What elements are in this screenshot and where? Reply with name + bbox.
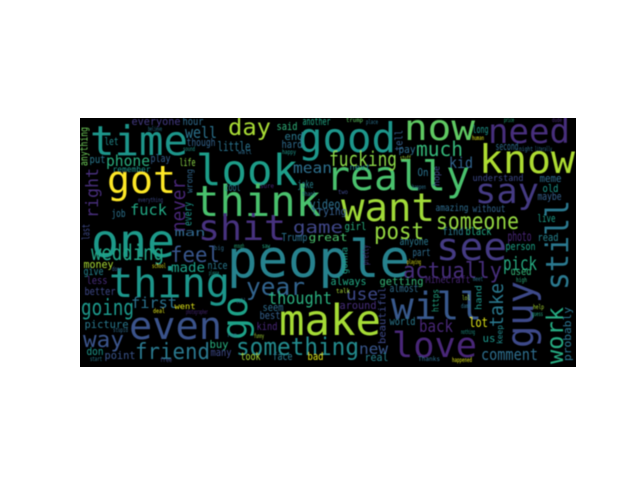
small words: wrong	[186, 169, 196, 193]
small words: everyone	[132, 116, 180, 128]
medium words: probably	[561, 307, 574, 361]
medium words: day	[228, 115, 271, 141]
small words: keep	[496, 325, 504, 344]
tiny faint words: call	[236, 298, 246, 305]
small words: hand	[474, 285, 484, 310]
largest words: say	[475, 172, 539, 212]
largest words: go	[216, 296, 256, 340]
largest words: really	[326, 152, 470, 200]
medium words: someone	[436, 209, 519, 235]
medium words: actually	[403, 259, 502, 284]
tiny faint words: talk	[336, 288, 350, 295]
small words: gonna	[340, 247, 350, 274]
tiny faint words: playing	[407, 259, 421, 266]
small words: read	[538, 232, 558, 244]
tiny faint words: stupid	[113, 327, 128, 334]
small words: used	[510, 266, 532, 278]
tiny faint words: damn	[461, 303, 471, 310]
small words: man	[174, 227, 206, 239]
largest words: think	[194, 177, 321, 227]
tiny faint words: everything	[138, 197, 163, 204]
small words: bad	[308, 351, 324, 363]
tiny faint words: wall	[238, 149, 252, 156]
tiny faint words: dude	[552, 117, 562, 124]
largest words: still	[540, 200, 576, 290]
small words: took	[240, 351, 261, 363]
largest words: need	[488, 112, 570, 152]
small words: many	[210, 347, 232, 359]
medium words: mean	[293, 159, 332, 177]
small words: don	[86, 346, 104, 358]
medium words: lot	[469, 316, 488, 331]
largest words: even	[129, 304, 222, 348]
small words: Minecraft	[426, 275, 470, 286]
small words: remember	[112, 165, 151, 174]
small words: went	[174, 302, 196, 311]
medium words: made	[171, 261, 205, 276]
small words: photo	[508, 230, 532, 245]
small words: almost	[390, 283, 418, 295]
small words: give	[84, 266, 104, 278]
medium words: first	[131, 294, 177, 312]
small words: person	[506, 241, 536, 253]
tiny faint words: saw	[262, 243, 270, 250]
medium words: right	[83, 168, 103, 218]
tiny faint words: guess	[532, 311, 543, 318]
medium words: use	[346, 285, 378, 305]
medium words: fucking	[329, 147, 397, 171]
largest words: shit	[198, 208, 286, 249]
medium words: well	[185, 123, 217, 142]
medium words: way	[83, 328, 124, 353]
small words: pretty	[362, 245, 372, 265]
tiny faint words: human	[472, 135, 484, 142]
medium words: something	[236, 333, 359, 361]
largest words: good	[298, 114, 396, 162]
small words: nice	[208, 260, 228, 272]
tiny faint words: Thanks	[418, 356, 440, 363]
small words: part	[412, 247, 430, 259]
largest words: time	[90, 117, 188, 165]
small words: best	[260, 310, 280, 322]
largest words: make	[279, 296, 381, 346]
tiny faint words: high	[516, 277, 527, 284]
small words: next	[350, 163, 371, 172]
medium words: game	[293, 218, 343, 238]
tiny faint words: happened	[452, 357, 472, 364]
small words: pay	[398, 144, 416, 156]
medium words: kid	[449, 154, 473, 172]
largest words: people	[227, 230, 410, 290]
small words: long	[472, 124, 488, 136]
largest words: want	[341, 186, 435, 231]
medium words: new	[359, 340, 389, 358]
tiny faint words: deal	[153, 308, 165, 315]
medium words: post	[374, 219, 424, 245]
small words: play	[150, 153, 170, 165]
medium words: feel	[170, 243, 220, 267]
small words: face	[272, 351, 292, 363]
largest words: will	[391, 285, 482, 328]
small words: anything	[78, 127, 90, 166]
small words: job	[112, 208, 126, 220]
tiny faint words: funny	[254, 333, 264, 340]
small words: better	[84, 286, 116, 298]
largest words: know	[479, 138, 576, 183]
small words: said	[276, 121, 298, 133]
small words: great	[308, 232, 348, 244]
small words: end	[284, 131, 304, 143]
tiny faint words: meet	[473, 276, 483, 283]
tiny faint words: help	[533, 304, 544, 311]
small words: real	[364, 352, 388, 364]
tiny faint words	[90, 117, 562, 364]
small words: hour	[182, 116, 204, 128]
tiny faint words: please	[209, 270, 219, 277]
largest words: look	[196, 146, 298, 196]
tiny faint words: happy	[282, 149, 296, 156]
tiny faint words: trump	[346, 117, 363, 124]
medium words: back	[419, 317, 453, 337]
small words: second	[496, 141, 518, 153]
small words: On	[418, 167, 428, 179]
small words: beautiful	[378, 287, 388, 344]
small words: understand	[472, 174, 524, 184]
medium words: work	[543, 307, 569, 364]
largest words: thing	[109, 259, 230, 307]
tiny faint words: start	[90, 356, 102, 363]
small words: every	[182, 202, 194, 226]
tiny faint words: night	[519, 146, 533, 153]
tiny faint words: nothing	[461, 329, 475, 336]
small words: maybe	[538, 191, 562, 203]
medium words: year	[246, 273, 305, 301]
small words	[78, 116, 562, 364]
small words: girl	[344, 221, 366, 233]
small words: last	[80, 224, 92, 240]
tiny faint words: enough	[234, 243, 244, 250]
tiny faint words: happen	[412, 184, 426, 191]
medium words: phone	[106, 152, 150, 170]
largest words: got	[107, 158, 176, 202]
medium words: wedding	[91, 241, 164, 265]
tiny faint words: two	[338, 189, 348, 196]
tiny faint words: school	[152, 263, 166, 270]
tiny faint words: lol	[462, 295, 470, 302]
small words: old	[542, 183, 558, 195]
small words: little	[218, 140, 251, 155]
medium words: pick	[503, 253, 537, 275]
tiny faint words: sound	[183, 146, 195, 153]
tiny faint words: literally	[535, 146, 552, 153]
largest words: love	[392, 326, 477, 366]
small words: though	[186, 137, 216, 149]
tiny faint words: stuff	[400, 155, 411, 162]
largest words: now	[404, 108, 475, 149]
small words: find	[442, 226, 464, 238]
small words: point	[104, 350, 136, 362]
small words: meme	[540, 173, 562, 185]
medium words: never	[168, 179, 190, 232]
medium words: thought	[268, 289, 332, 309]
tiny faint words: big	[214, 245, 224, 252]
tiny faint words: price	[504, 117, 514, 124]
small words: https	[432, 289, 442, 312]
medium words: going	[81, 296, 134, 321]
small words: put	[90, 154, 106, 166]
tiny faint words: thank	[302, 191, 316, 198]
small words: Trump	[282, 232, 308, 244]
small words: cool	[224, 182, 240, 194]
tiny faint words: sure	[260, 183, 274, 190]
small words: hope	[432, 166, 442, 186]
medium words: fuck	[130, 201, 167, 219]
small words: anyone	[400, 236, 428, 248]
medium words	[81, 115, 574, 365]
small words: getting	[380, 276, 424, 288]
largest words	[90, 108, 576, 366]
small words: amazing	[436, 203, 468, 214]
largest words: see	[436, 225, 507, 269]
small words: trying	[312, 206, 346, 218]
largest words: guy	[499, 281, 542, 348]
tiny faint words: done	[112, 266, 122, 273]
tiny faint words: photographer	[186, 309, 208, 316]
word cloud panel background	[80, 118, 576, 367]
small words: hard	[282, 139, 302, 151]
small words: seem	[262, 302, 284, 314]
small words: less	[86, 275, 108, 287]
medium words: much	[416, 137, 463, 161]
tiny faint words: run	[227, 332, 237, 339]
small words: live	[538, 213, 556, 225]
small words: always	[330, 276, 366, 288]
small words: around	[340, 300, 376, 312]
small words: tell	[394, 130, 406, 151]
small words: video	[310, 198, 340, 213]
small words: without	[472, 204, 506, 215]
small words: kind	[256, 321, 278, 333]
small words: money	[84, 259, 114, 271]
small words: world	[390, 316, 416, 328]
small words: black	[466, 226, 492, 238]
medium words: friend	[135, 340, 210, 365]
small words: buy	[210, 339, 228, 351]
small words: let	[104, 136, 118, 148]
tiny faint words: believe	[148, 126, 162, 133]
tiny faint words: place	[366, 119, 378, 126]
small words: joke	[298, 179, 314, 191]
largest words: one	[91, 214, 175, 268]
small words: another	[302, 116, 330, 128]
small words: picture	[84, 319, 128, 331]
medium words: take	[486, 283, 508, 327]
tiny faint words: free	[160, 357, 172, 364]
word cloud: all words	[78, 108, 576, 366]
medium words: comment	[481, 345, 538, 364]
small words: life	[180, 157, 196, 169]
small words: us	[482, 333, 496, 345]
